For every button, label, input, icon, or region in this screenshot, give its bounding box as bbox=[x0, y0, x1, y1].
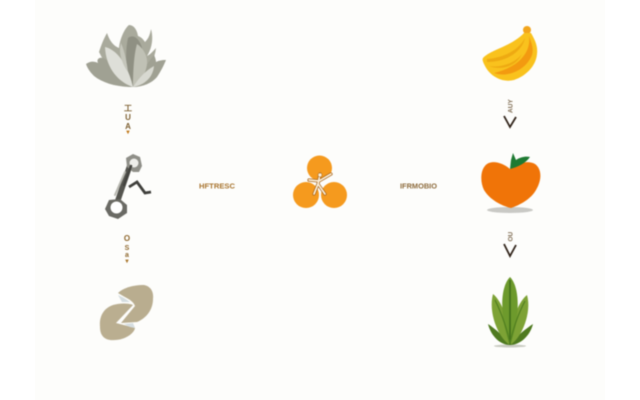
icon: green leafy plant bbox=[488, 277, 533, 348]
icon: beige stones bbox=[100, 285, 153, 340]
arrow: heart fruit to plant bbox=[504, 231, 516, 256]
vertical label: upper left: U bbox=[125, 113, 131, 122]
arrow: banana to heart fruit: AUY bbox=[508, 99, 514, 113]
vertical label: upper left: A bbox=[125, 122, 131, 131]
vertical label: lower left: S bbox=[125, 245, 130, 252]
arrow: heart fruit to plant: OU bbox=[508, 231, 514, 242]
arrow: banana to heart fruit bbox=[504, 99, 516, 127]
vertical label: lower left: O bbox=[124, 234, 130, 243]
icon: orange heart fruit bbox=[481, 153, 540, 213]
icon: yellow banana bunch bbox=[483, 26, 537, 81]
horizontal label: right: IFRMOBIO bbox=[400, 184, 438, 190]
horizontal label: left: HFTRESC bbox=[199, 182, 235, 190]
vertical label: lower left: ▼ bbox=[124, 259, 130, 265]
vertical label: lower left: a bbox=[125, 252, 129, 259]
vertical label: upper left: ▼ bbox=[125, 130, 131, 136]
icon: grey agave plant bbox=[86, 25, 166, 87]
vertical label: upper left: 工 bbox=[124, 104, 132, 113]
icon: three orange circles with figure bbox=[293, 156, 347, 208]
vertical label: lower left bbox=[124, 234, 130, 265]
vertical label: upper left bbox=[124, 104, 132, 136]
icon: wrench tool bbox=[105, 154, 151, 219]
